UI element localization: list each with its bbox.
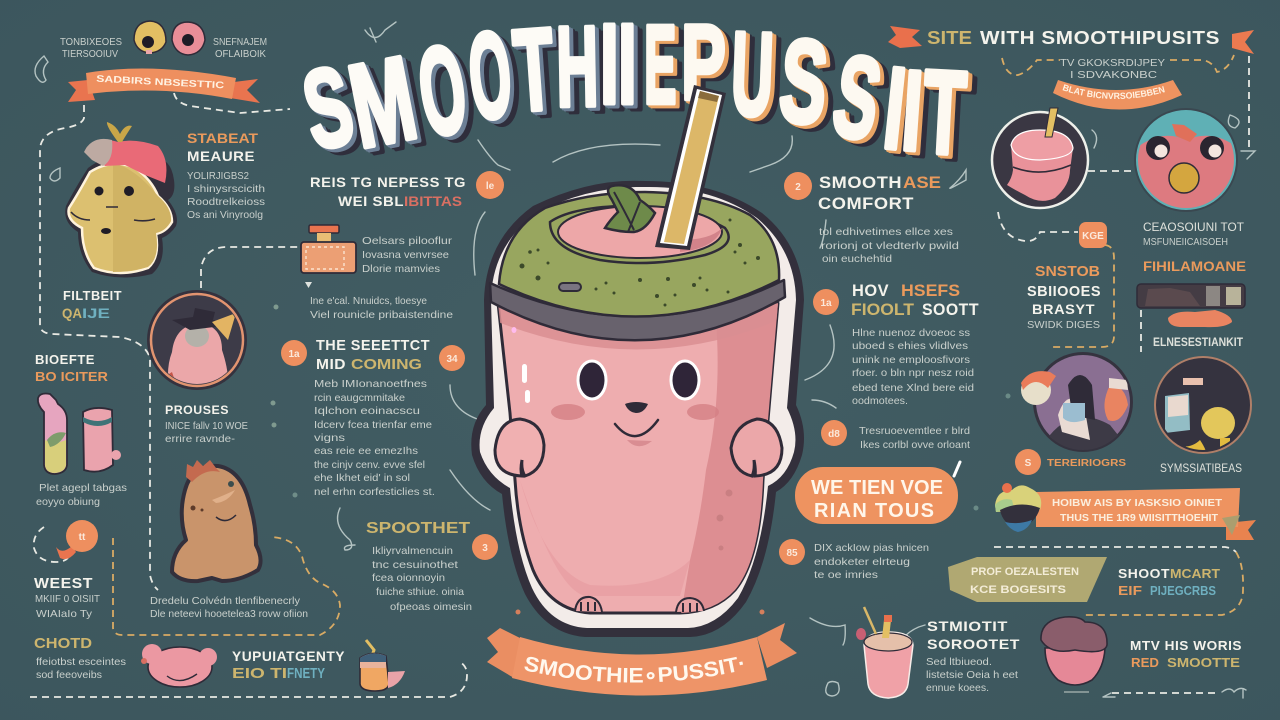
text: weest: MKIIF 0 OISIIT <box>35 593 101 605</box>
text: ceaosoiuni: CEAOSOIUNI TOT <box>1143 222 1244 234</box>
text: mtv his woris <box>1130 638 1242 670</box>
text: bioefte bo iciter: BO ICITER <box>35 369 109 384</box>
orange ribbon callout: HOIBW AIS BY IASKSIO OINIET <box>1052 497 1223 509</box>
text: dredelu caption: Dredelu Colvédn tlenfibenecrly <box>150 595 301 607</box>
top right heading <box>888 26 1254 54</box>
text: mtv his woris: RED <box>1131 655 1159 670</box>
feet <box>575 597 704 612</box>
number badge: 2 <box>795 182 801 193</box>
header: top left faces: TIERSOOIUV <box>62 48 118 60</box>
icon: small smoothie cup <box>856 607 913 698</box>
text: ceaosoiuni <box>1143 222 1246 274</box>
cup body <box>498 303 778 613</box>
text block: spoothet: tnc cesuinothet <box>372 559 458 571</box>
text: stmiotit <box>926 618 1020 694</box>
text: ine ecal: Viel rounicle pribaistendine <box>310 309 453 321</box>
text block: stabeat meaure <box>187 130 265 221</box>
heading: hov hsefs <box>851 281 979 319</box>
text: dix acklow <box>814 542 929 581</box>
icon: flag right <box>1232 30 1254 54</box>
number badge <box>281 340 307 366</box>
text block: main paragraph: Meb IMIonanoetfnes <box>314 378 427 390</box>
callout bubble <box>56 520 98 559</box>
text: mtv his woris: MTV HIS WORIS <box>1130 638 1242 653</box>
number badge: S <box>1025 458 1032 469</box>
text: snstob: SNSTOB <box>1035 263 1100 280</box>
text: bottle caption: eoyyo obiung <box>36 496 100 508</box>
title: E <box>644 3 676 128</box>
text: shoot mcart: PIJEGCRBS <box>1150 583 1216 598</box>
icon: fruit bowl <box>995 483 1041 532</box>
text: reis to nepess <box>310 174 466 209</box>
body shading <box>498 300 790 620</box>
icon: toolbox <box>301 225 356 273</box>
icon: yellow face <box>134 21 166 54</box>
title: O <box>463 6 517 145</box>
bottom ribbon <box>487 623 797 696</box>
text: prouses: errire ravnde- <box>165 433 236 445</box>
text block: spoothet: fcea oionnoyin <box>372 572 445 584</box>
text: weest: WIAIaIo Ty <box>36 608 93 620</box>
number badge <box>784 172 812 200</box>
straw <box>655 85 726 250</box>
text: dredelu caption <box>150 595 308 620</box>
callout pill: RIAN TOUS <box>814 500 934 522</box>
ribbon band <box>512 637 767 696</box>
cup outer silhouette <box>471 181 804 637</box>
title: S <box>293 44 363 174</box>
text: oelsars: Oelsars pilooflur <box>362 235 453 247</box>
text: dix acklow: endoketer elrteug <box>814 556 910 568</box>
text: reis to nepess: REIS TG NEPESS TG <box>310 174 466 190</box>
text block: hov paragraph <box>852 327 974 407</box>
text: prouses: INICE fallv 10 WOE <box>165 420 248 432</box>
text block: comfort: oin euchehtid <box>822 253 892 265</box>
dark halo <box>65 156 177 278</box>
label: filtbeit qaije <box>62 289 122 321</box>
title: S <box>775 13 833 150</box>
text: prouses: PROUSES <box>165 403 229 417</box>
number badge: 1a <box>288 349 300 360</box>
title: I <box>600 0 619 127</box>
text block: main paragraph: nel erhn corfesticlies st. <box>314 486 435 498</box>
text: shoot mcart <box>1118 566 1220 598</box>
caption left: TONBIXEOES <box>60 36 122 48</box>
heading: smooth ase comfort: SMOOTH <box>819 173 902 192</box>
icon: two bottles <box>38 394 121 474</box>
cup white outline <box>480 187 796 628</box>
text block: main paragraph: vigns <box>314 432 345 444</box>
title: P <box>681 2 726 122</box>
title: T <box>920 45 969 180</box>
text: stmiotit: listetsie Oeia h eet <box>926 669 1018 681</box>
header: top left faces <box>60 21 267 60</box>
green lid <box>499 192 779 317</box>
title: I <box>618 0 637 127</box>
subtitle text and curved banner: TV GKOKSRDIJPEY <box>1060 57 1165 69</box>
text block: comfort: rorionj ot vledterlv pwild <box>821 240 959 252</box>
header: top left faces: OFLAIBOIK <box>215 48 266 60</box>
text block: spoothet: fuiche sthiue. oinia <box>376 586 464 598</box>
number badge: le <box>486 181 495 192</box>
text: oelsars: Dlorie mamvies <box>362 263 440 275</box>
text block: main paragraph: rcin eaugcmmitake <box>314 392 405 404</box>
title: U <box>729 7 776 141</box>
text: shoot mcart: SHOOT <box>1118 566 1170 581</box>
icon: brown character <box>172 460 261 581</box>
food on top <box>86 140 166 183</box>
orange ribbon callout: THUS THE 1R9 WIISITTHOEHIT <box>1060 512 1219 524</box>
title <box>293 0 969 180</box>
text: stmiotit: STMIOTIT <box>927 618 1008 634</box>
icon: orange jar <box>360 640 405 691</box>
text block: comfort <box>819 226 959 265</box>
text block: stabeat meaure: STABEAT <box>187 130 258 146</box>
heading: the seeettct: MID <box>316 356 346 373</box>
number badge: 34 <box>446 354 458 365</box>
label: filtbeit qaije: FILTBEIT <box>63 289 122 303</box>
text: snstob <box>1027 263 1101 331</box>
left arm <box>495 419 544 476</box>
text: mtv his woris: SMOOTTE <box>1167 655 1240 670</box>
text block: spoothet: SPOOTHET <box>366 520 470 537</box>
text: tresruoev <box>859 425 970 451</box>
text: chotd: sod feeoveibs <box>36 669 102 681</box>
title: I <box>878 43 911 174</box>
text: reis to nepess: IBITTAS <box>404 193 462 209</box>
text block: stabeat meaure: YOLIRJIGBS2 <box>187 170 249 182</box>
heading: smooth ase comfort: ASE <box>903 173 941 192</box>
lid speckles <box>520 218 760 306</box>
number badge <box>476 171 504 199</box>
caption right: SNEFNAJEM <box>213 36 267 48</box>
text: weest: WEEST <box>34 575 93 592</box>
text block: main paragraph <box>314 378 435 498</box>
text: ceaosoiuni: FIHILAMOANE <box>1143 258 1246 274</box>
text block: stabeat meaure: Os ani Vinyroolg <box>187 209 263 221</box>
text block: hov paragraph: Hlne nuenoz dvoeoc ss <box>852 327 970 339</box>
text: elnesestiankit: ELNESESTIANKIT <box>1153 337 1243 349</box>
text block: hov paragraph: uboed s ehies vlidlves <box>852 340 968 352</box>
peach fruit <box>1021 371 1056 405</box>
tag kge: KGE <box>1082 231 1104 242</box>
right eye <box>671 361 699 399</box>
text block: stabeat meaure: Roodtrelkeioss <box>187 196 265 208</box>
text block: spoothet <box>366 520 472 613</box>
title: T <box>510 4 558 136</box>
icon: dark device with fruit <box>1137 284 1245 327</box>
icon: pink pig <box>141 644 217 687</box>
text block: hov paragraph: rfoer. o bln npr nesz roid <box>852 367 974 379</box>
subtitle text and curved banner <box>1053 57 1182 110</box>
top right heading: WITH SMOOTHIPUSITS <box>980 28 1220 48</box>
text: ine ecal <box>305 282 453 321</box>
title: O <box>410 18 474 163</box>
text: ine ecal: Ine e'cal. Nnuidcs, tloesye <box>310 295 427 307</box>
heading: hov hsefs: HSEFS <box>901 281 960 300</box>
heading: smooth ase comfort: COMFORT <box>818 194 914 213</box>
icon: teal face circle <box>1134 108 1240 215</box>
icon: pink face <box>172 22 205 55</box>
text block: hov paragraph: unink ne emploosfivors <box>852 354 970 366</box>
ribbon tails <box>487 623 797 678</box>
orange ribbon callout <box>1036 488 1256 540</box>
olive label <box>948 557 1107 602</box>
callout pill: WE TIEN VOE <box>811 477 943 499</box>
text: oelsars: Iovasna venvrsee <box>362 249 449 261</box>
heading: the seeettct <box>316 337 430 373</box>
text: bottle caption <box>36 482 127 508</box>
icon: pink cake circle <box>992 108 1088 208</box>
title: S <box>825 30 890 165</box>
text block: stabeat meaure: I shinysrscicith <box>187 183 265 195</box>
face <box>94 186 104 196</box>
text block: hov paragraph: ebed tene Xlnd bere eid <box>852 382 974 394</box>
icon: dark circle scene <box>1155 357 1251 460</box>
text: snstob: SBIIOOES <box>1027 283 1101 300</box>
text: shoot mcart: EIF <box>1118 583 1142 598</box>
icon: yellow potato character <box>65 122 177 278</box>
lid rim <box>490 280 785 340</box>
number badge: 1a <box>820 298 832 309</box>
text: tresruoev: Tresruoevemtlee r blrd <box>859 425 970 437</box>
text: yupuiatgenty: EIO TI <box>232 665 287 682</box>
number badge: 3 <box>482 543 488 554</box>
icon: portrait circle <box>147 290 247 395</box>
heading: hov hsefs: FIOOLT <box>851 300 915 319</box>
number badge <box>1015 449 1041 475</box>
title: H <box>555 3 599 131</box>
text: snstob: BRASYT <box>1032 301 1095 317</box>
text: weest <box>34 575 101 620</box>
heading: hov hsefs: SOOTT <box>922 300 979 319</box>
label: filtbeit qaije: IJE <box>82 305 110 321</box>
number badge <box>821 420 847 446</box>
text: ceaosoiuni: MSFUNEIICAISOEH <box>1143 236 1228 248</box>
title: M <box>340 32 426 173</box>
olive label: PROF OEZALESTEN <box>971 566 1079 578</box>
text: stmiotit: ennue koees. <box>926 682 989 694</box>
icon: acorn bowl <box>1041 617 1107 692</box>
number badge <box>813 289 839 315</box>
body right shade <box>113 163 171 272</box>
text: teresa labels: SYMSSIATIBEAS <box>1160 463 1242 475</box>
text: dix acklow: DIX ackIow pias hnicen <box>814 542 929 554</box>
heading: the seeettct: COMING <box>351 356 422 373</box>
icon: flag left <box>888 26 922 48</box>
right arm <box>731 419 782 476</box>
text block: spoothet: ofpeoas oimesin <box>390 601 472 613</box>
ribbon title: SMOOTHIE∘PUSSIT· <box>524 656 743 682</box>
callout bubble: tt <box>79 532 86 543</box>
text: prouses <box>165 403 248 445</box>
label: filtbeit qaije: QA <box>62 305 82 321</box>
text: teresa labels <box>1047 457 1242 475</box>
icon: purple circle scene <box>1021 352 1133 452</box>
left eye <box>578 361 606 399</box>
text block: main paragraph: eas reie ee emezIhs <box>314 445 418 457</box>
left bottle <box>38 394 67 474</box>
olive label: KCE BOGESITS <box>970 584 1066 596</box>
number badge: 85 <box>786 548 798 559</box>
nose and mouth <box>615 402 658 446</box>
smoothie cup mascot <box>471 85 804 637</box>
left banner <box>68 69 260 103</box>
leaf on lid <box>605 185 655 232</box>
body <box>69 164 172 273</box>
subtitle text and curved banner: BLAT BICNVRSOIEBBEN <box>1062 84 1165 99</box>
text: chotd <box>34 635 126 681</box>
text: teresa labels: TEREIRIOGRS <box>1047 457 1126 469</box>
text: shoot mcart: MCART <box>1170 566 1220 581</box>
text: reis to nepess: WEI SBL <box>338 193 404 209</box>
left banner: SADBIRS NBSESTTIC <box>96 74 225 91</box>
text: snstob: SWIDK DIGES <box>1027 319 1100 331</box>
number badge <box>779 539 805 565</box>
text: yupuiatgenty: FNETY <box>287 665 325 682</box>
text: chotd: ffeiotbst esceintes <box>36 656 126 668</box>
text: bottle caption: Plet agepl tabgas <box>39 482 127 494</box>
text block: stabeat meaure: MEAURE <box>187 148 255 164</box>
text: dix acklow: te oe imries <box>814 569 878 581</box>
cheeks <box>551 404 719 420</box>
text: chotd: CHOTD <box>34 635 92 652</box>
title: I <box>898 47 926 174</box>
text block: main paragraph: ehe Ikhet eid' in sol <box>314 472 410 484</box>
subtitle text and curved banner: I SDVAKONBC <box>1070 69 1157 81</box>
text: dredelu caption: Dle neteevi hooetelea3 rovw ofiion <box>150 608 308 620</box>
top right heading: SITE <box>927 28 972 48</box>
number badge: d8 <box>828 429 840 440</box>
text block: comfort: tol edhivetimes ellce xes <box>819 226 953 238</box>
heading: hov hsefs: HOV <box>852 281 889 300</box>
text: yupuiatgenty: YUPUIATGENTY <box>232 648 345 664</box>
text: yupuiatgenty <box>232 648 345 682</box>
text block: main paragraph: Idcerv fcea trienfar eme <box>314 419 432 431</box>
text block: hov paragraph: oodmotees. <box>852 395 908 407</box>
text block: spoothet: Ikliyrvalmencuin <box>372 545 453 557</box>
text: stmiotit: SOROOTET <box>927 636 1020 652</box>
text: bioefte bo iciter <box>35 352 109 384</box>
number badge <box>472 534 498 560</box>
heading: the seeettct: THE SEEETTCT <box>316 337 430 354</box>
number badge <box>439 345 465 371</box>
tag kge <box>1079 222 1107 248</box>
text block: main paragraph: Iqlchon eoinacscu <box>314 405 420 417</box>
callout pill <box>795 462 960 524</box>
right bottle <box>83 408 121 472</box>
text: tresruoev: Ikes corlbl ovve orloant <box>860 439 970 451</box>
text block: main paragraph: the cinjv cenv. evve sfel <box>314 459 425 471</box>
text: stmiotit: Sed ltbiueod. <box>926 656 992 668</box>
text: bioefte bo iciter: BIOEFTE <box>35 352 95 367</box>
text: oelsars <box>362 235 453 275</box>
lid opening with pink smoothie <box>550 206 729 263</box>
heading: smooth ase comfort <box>818 173 941 213</box>
